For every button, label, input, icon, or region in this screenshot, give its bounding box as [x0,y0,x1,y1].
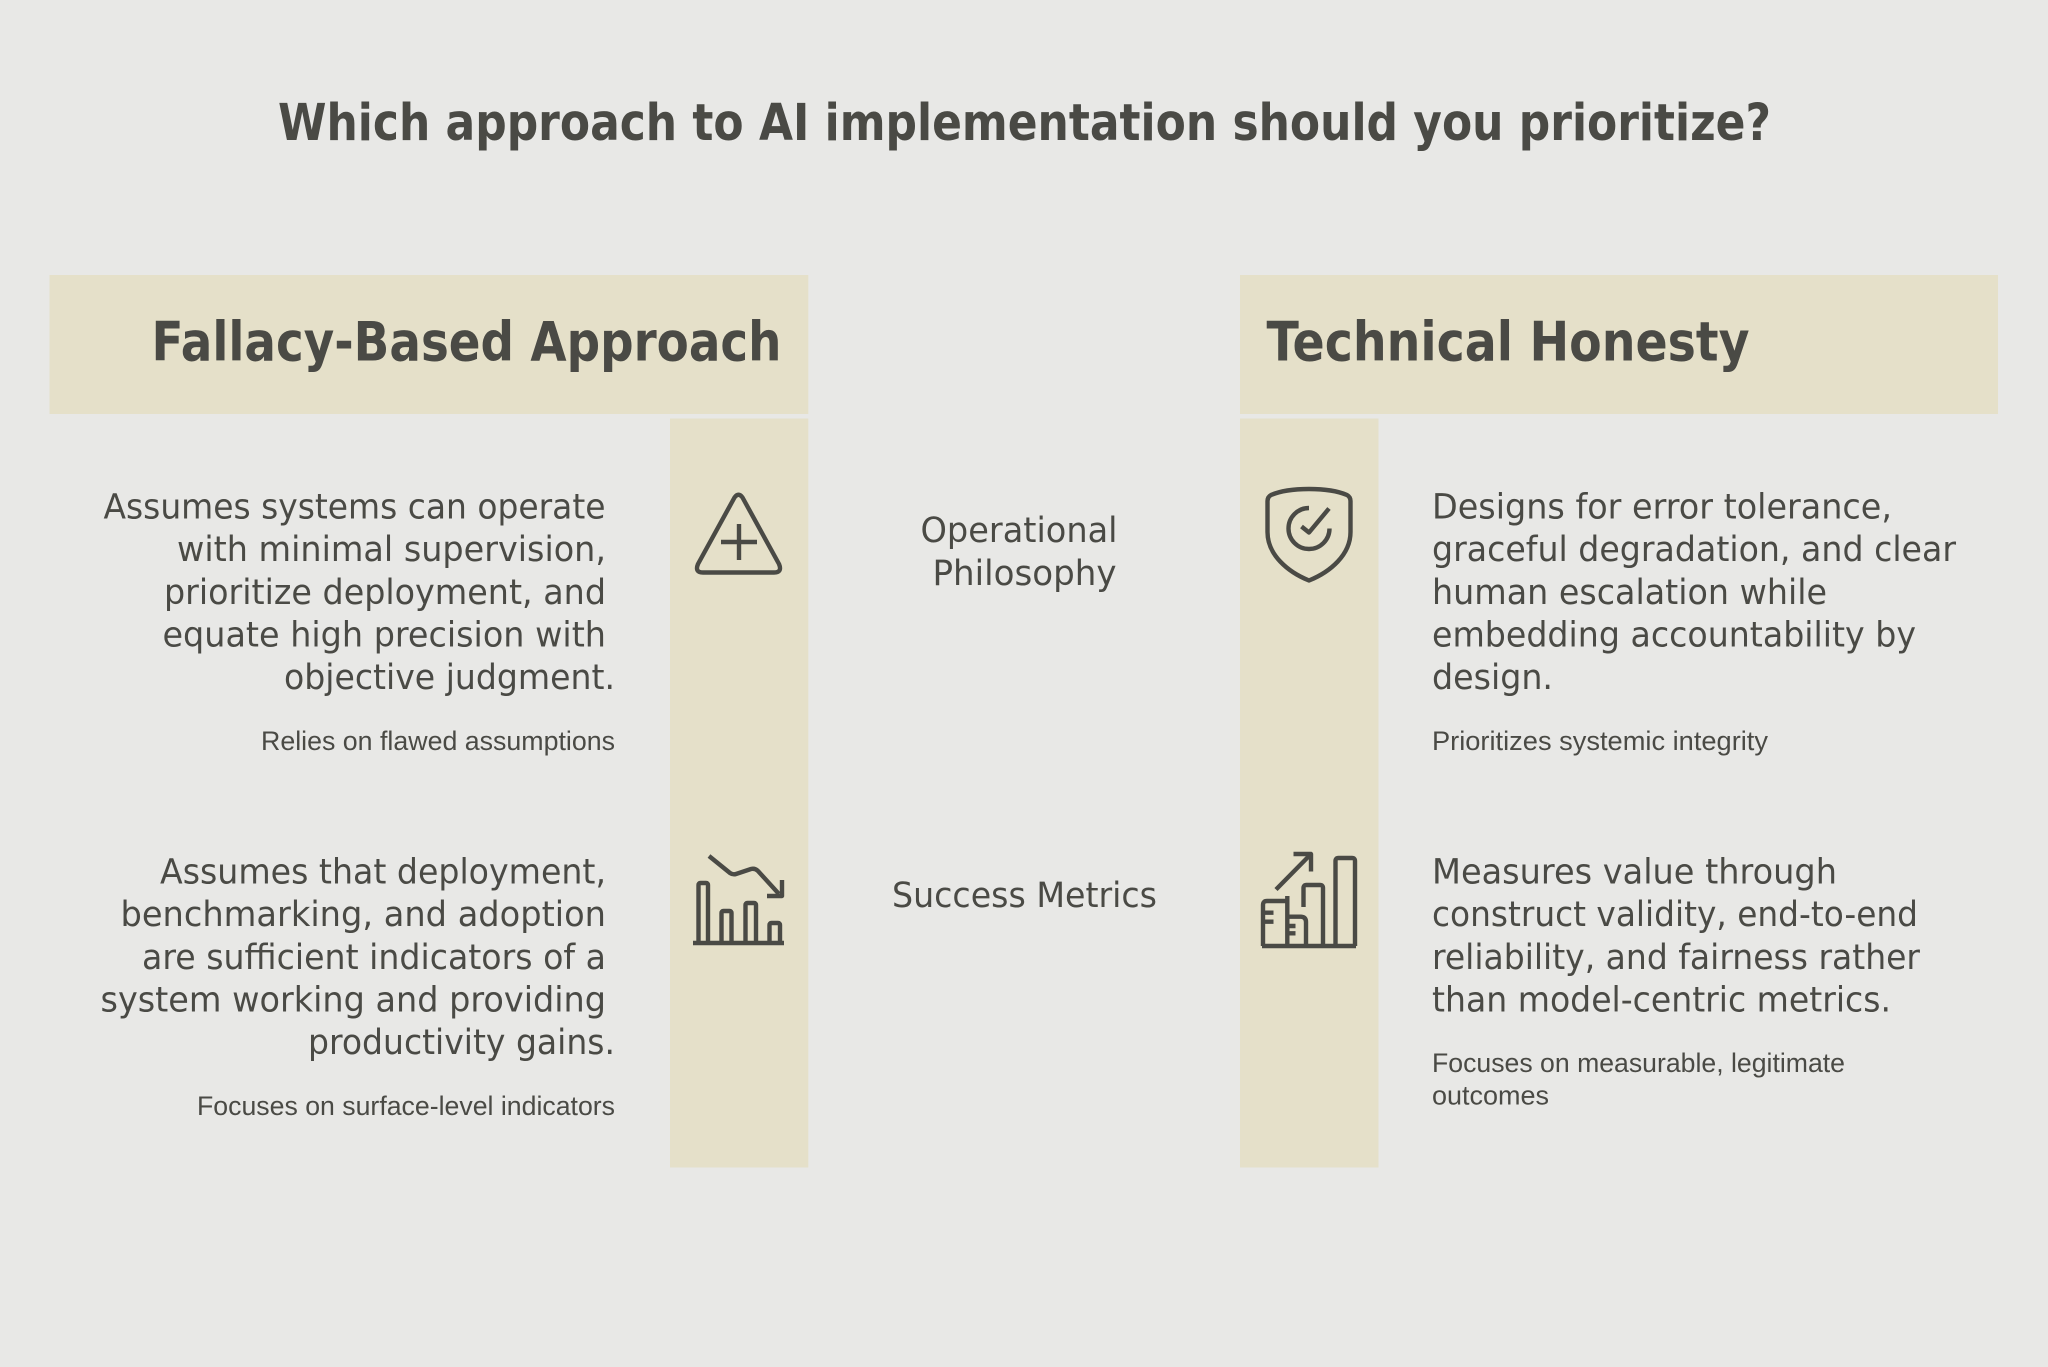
text block: technical honesty success metrics: than model-centric metrics. [1432,980,1891,1020]
text block: fallacy success metrics [100,852,615,1121]
text block: technical honesty success metrics: Measures value through [1432,852,1837,892]
label: operational philosophy: Philosophy [932,554,1116,594]
panel: left icon column [670,418,808,1168]
text block: fallacy success metrics: Assumes that deployment, [160,852,606,892]
text block: fallacy operational philosophy: equate high precision with [162,616,606,656]
text block: fallacy success metrics: benchmarking, and adoption [120,895,606,935]
text block: technical honesty success metrics: Focuses on measurable, legitimate [1432,1048,1845,1078]
icon: shield with check [1268,489,1350,580]
text block: fallacy operational philosophy [104,488,615,756]
text block: technical honesty operational philosophy: graceful degradation, and clear [1432,530,1957,570]
text block: fallacy success metrics: system working and providing [100,980,606,1020]
text block: fallacy operational philosophy: Assumes systems can operate [104,488,606,528]
panel: fallacy-based approach header [50,275,808,414]
text block: technical honesty operational philosophy: Designs for error tolerance, [1432,488,1892,528]
label: operational philosophy: Operational [920,511,1118,551]
panel: fallacy-based approach header: Fallacy-Based Approach [152,310,782,374]
text block: technical honesty operational philosophy [1432,488,1957,756]
text block: technical honesty operational philosophy: Prioritizes systemic integrity [1432,726,1769,756]
panel: technical honesty header [1240,275,1998,414]
panel: technical honesty header: Technical Honesty [1266,310,1750,374]
text block: fallacy operational philosophy: with minimal supervision, [177,530,606,570]
label: success metrics: Success Metrics [892,876,1157,916]
title: Which approach to AI implementation should you prioritize? [278,94,1771,153]
icon: triangle with plus [697,495,780,572]
text block: fallacy operational philosophy: prioritize deployment, and [164,573,606,613]
text block: fallacy operational philosophy: objective judgment. [284,658,615,698]
text block: technical honesty success metrics: construct validity, end-to-end [1432,895,1918,935]
text block: technical honesty operational philosophy: embedding accountability by [1432,616,1916,656]
icon: declining bar chart [693,856,784,943]
text block: technical honesty success metrics [1432,852,1921,1110]
panel: right icon column [1240,418,1378,1168]
text block: technical honesty success metrics: reliability, and fairness rather [1432,938,1921,978]
text block: technical honesty success metrics: outcomes [1432,1080,1549,1110]
text block: fallacy success metrics: Focuses on surface-level indicators [197,1091,615,1121]
text block: technical honesty operational philosophy: human escalation while [1432,573,1827,613]
label: operational philosophy [920,511,1118,594]
text block: fallacy success metrics: productivity gains. [308,1023,615,1063]
icon: rising bar chart [1262,854,1356,946]
text block: technical honesty operational philosophy: design. [1432,658,1553,698]
text block: fallacy success metrics: are sufficient indicators of a [142,938,606,978]
text block: fallacy operational philosophy: Relies on flawed assumptions [261,726,615,756]
